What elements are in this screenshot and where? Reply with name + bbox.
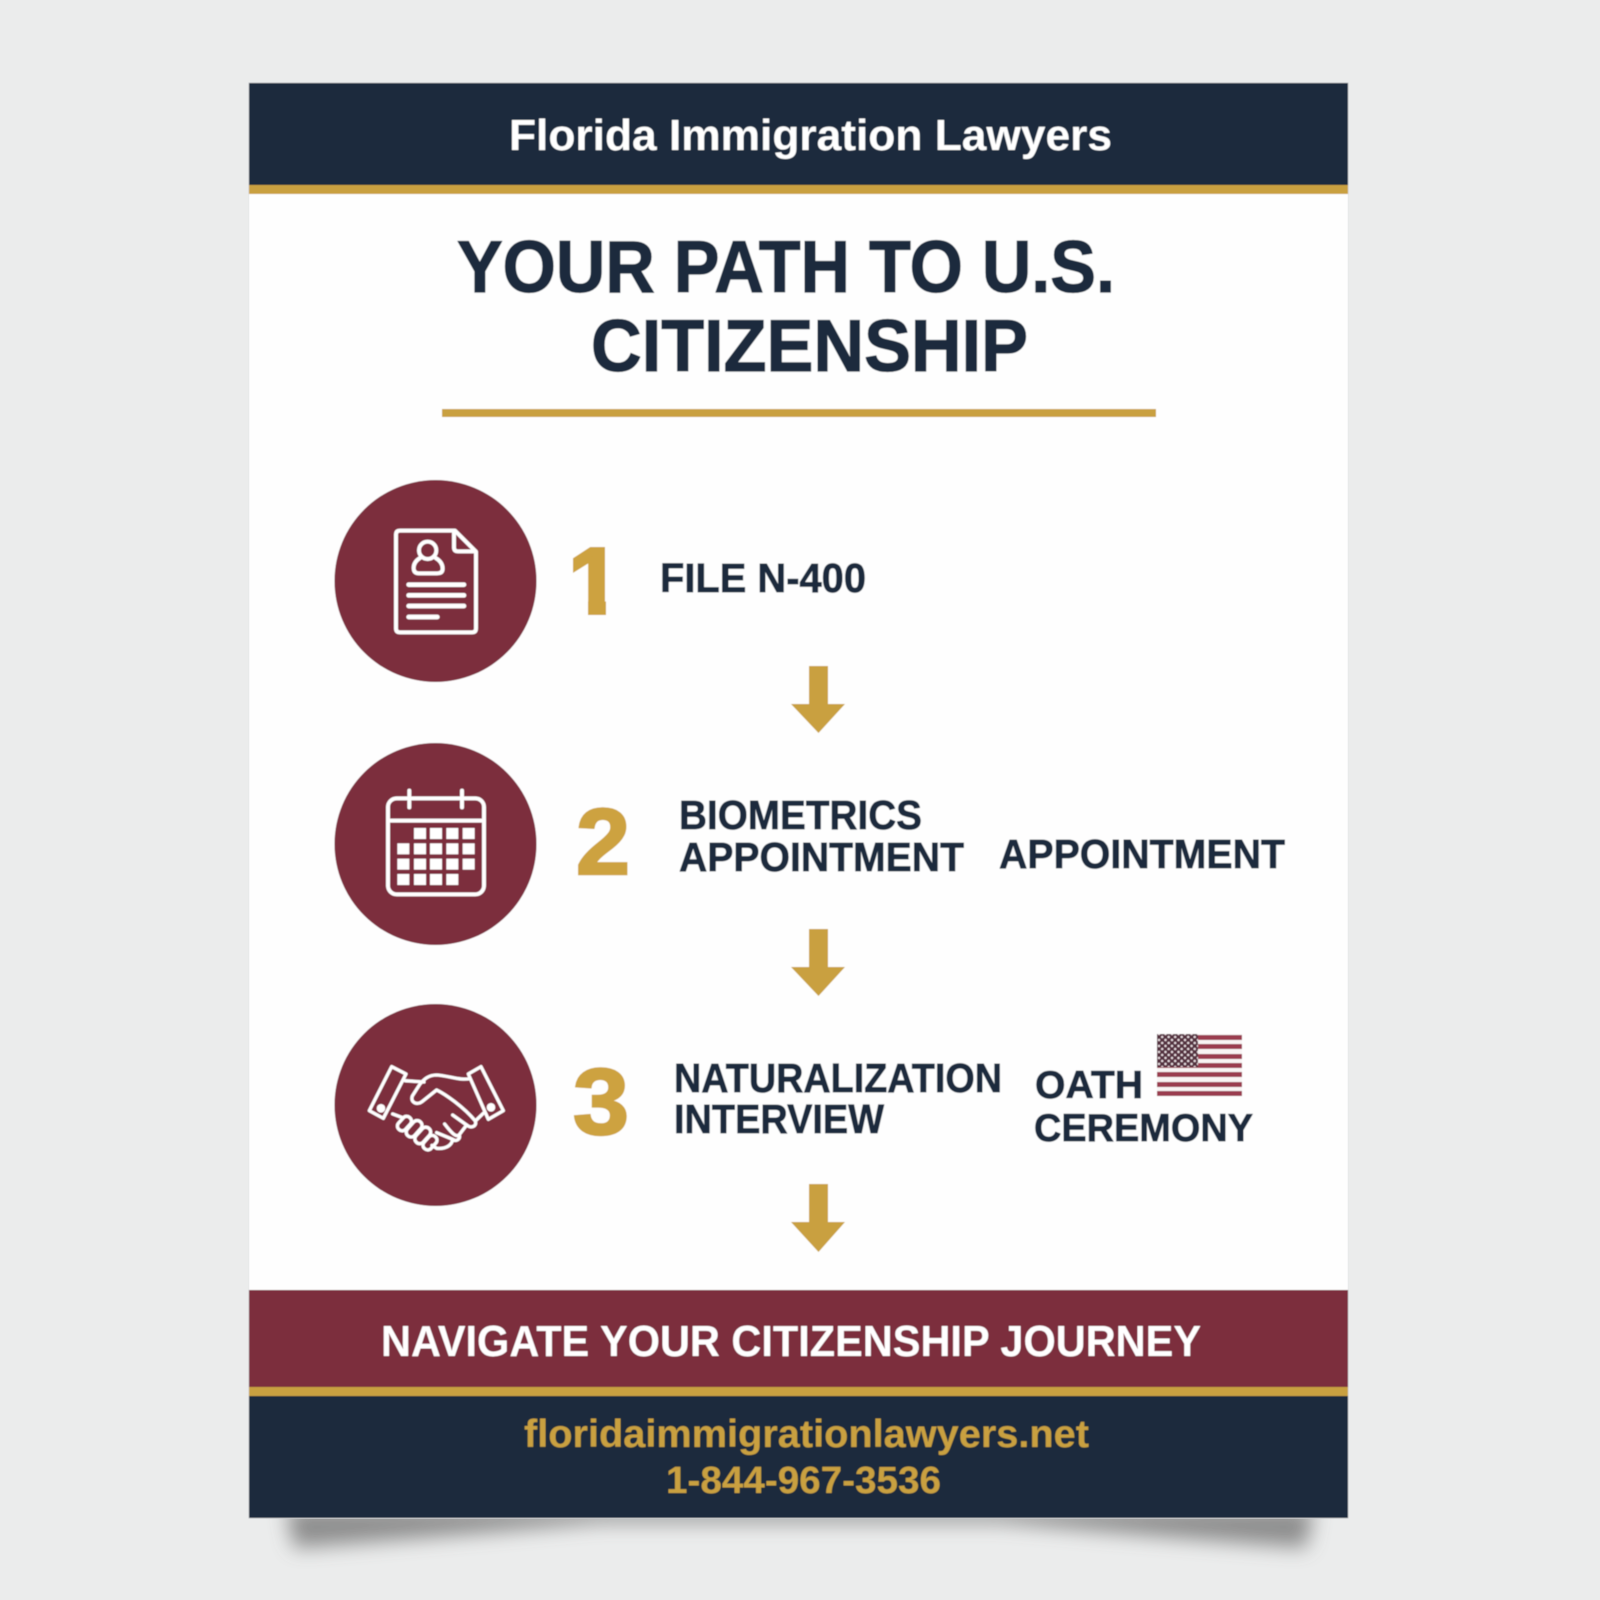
- label: oath ceremony: OATH: [1035, 1064, 1143, 1107]
- step 3: [334, 1004, 1253, 1206]
- label: oath ceremony: CEREMONY: [1034, 1107, 1253, 1150]
- footer band: [249, 1387, 1348, 1518]
- title: CITIZENSHIP: [591, 306, 1028, 387]
- brand name: Florida Immigration Lawyers: [509, 111, 1112, 160]
- label: naturalization interview: NATURALIZATION: [674, 1055, 1002, 1101]
- label: naturalization interview: [674, 1055, 1002, 1142]
- tagline: NAVIGATE YOUR CITIZENSHIP JOURNEY: [381, 1317, 1201, 1366]
- title: YOUR PATH TO U.S.: [457, 227, 1115, 308]
- title rule: [442, 409, 1156, 417]
- label: oath ceremony: [1034, 1064, 1253, 1150]
- label: file n-400: FILE N-400: [660, 555, 866, 601]
- header band: [249, 83, 1348, 194]
- label: biometrics appointment: [679, 792, 964, 880]
- step 1: [334, 480, 866, 682]
- icon: american flag: [1157, 1034, 1242, 1096]
- phone number: 1-844-967-3536: [666, 1460, 941, 1502]
- label: biometrics appointment: BIOMETRICS: [679, 792, 922, 838]
- label: biometrics appointment: APPOINTMENT: [679, 834, 964, 880]
- number 1: 1: [568, 529, 620, 633]
- website: floridaimmigrationlawyers.net: [524, 1413, 1089, 1456]
- poster shadow: [286, 1508, 1314, 1548]
- icon: calendar: [334, 743, 536, 945]
- number 3: 3: [573, 1049, 629, 1154]
- title: [457, 227, 1115, 387]
- step 2: [334, 743, 1285, 945]
- arrow 1: [791, 666, 845, 733]
- poster: [248, 82, 1349, 1519]
- label: naturalization interview: INTERVIEW: [674, 1096, 884, 1142]
- icon: handshake: [334, 1004, 536, 1206]
- arrow 3: [791, 1184, 845, 1252]
- tagline band: [249, 1290, 1348, 1387]
- number 2: 2: [576, 789, 630, 894]
- icon: document with person: [334, 480, 536, 682]
- label: appointment: APPOINTMENT: [999, 831, 1285, 877]
- arrow 2: [791, 929, 845, 996]
